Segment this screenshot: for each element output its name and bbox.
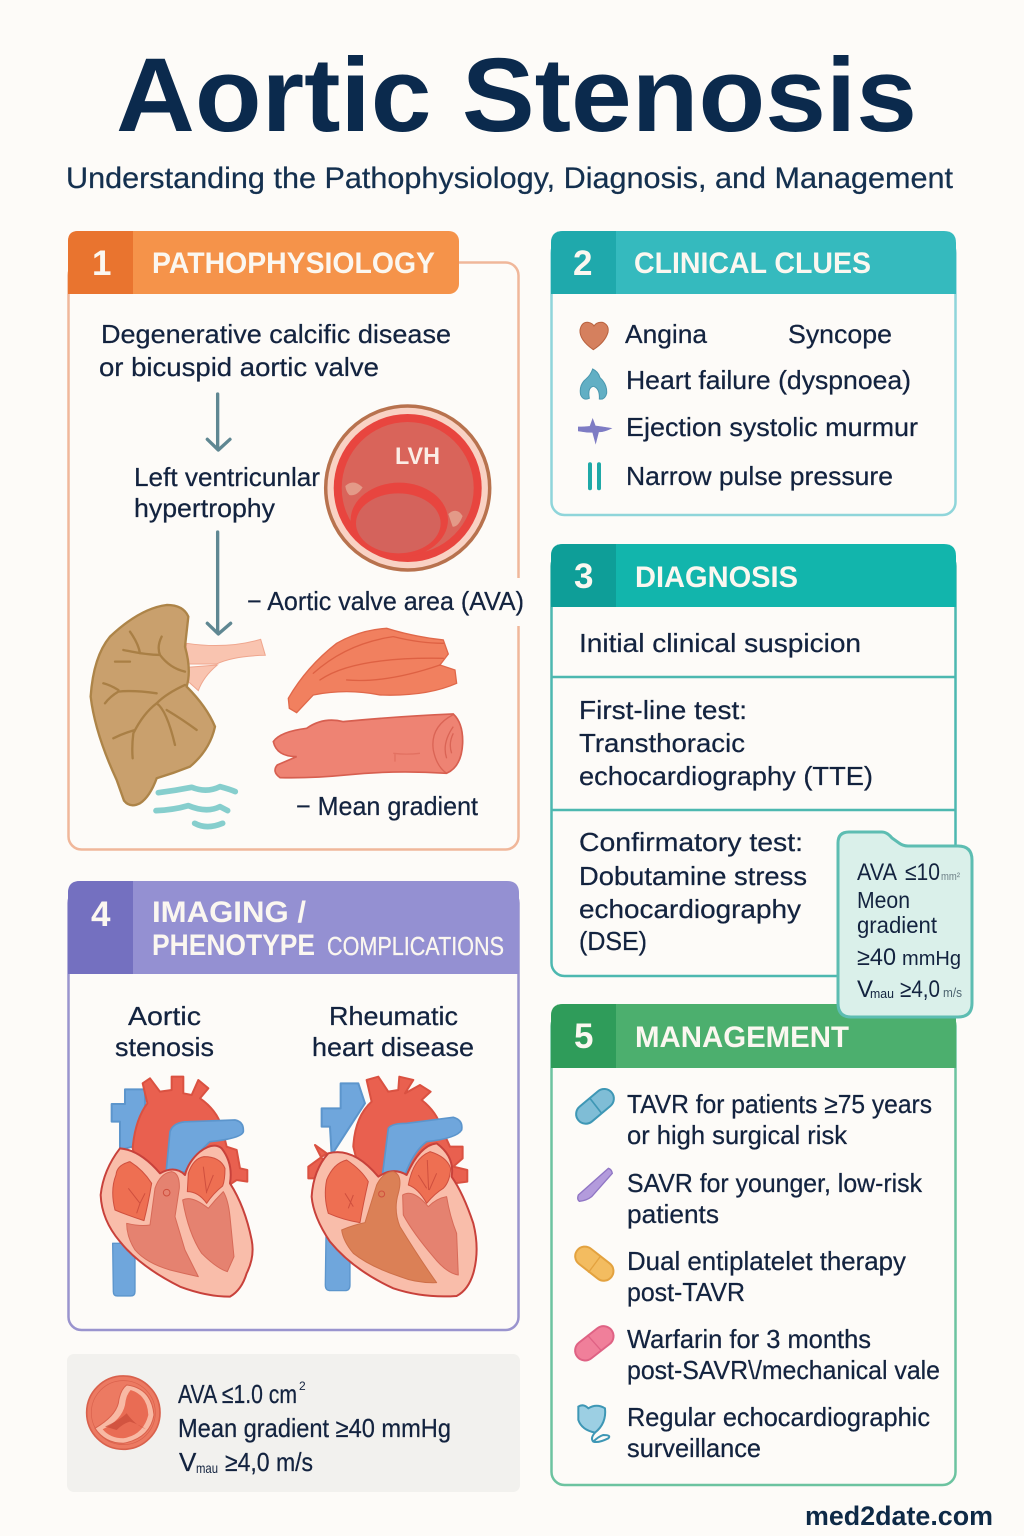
callout: DSE criteria: mau	[870, 986, 894, 1001]
text: antiplatelet	[627, 1246, 906, 1307]
step: confirmatory test: echocardiography	[579, 894, 801, 924]
icon: stenotic valve	[87, 1376, 160, 1449]
label: rheumatic heart disease: Rheumatic	[329, 1001, 458, 1031]
text: warfarin	[627, 1324, 940, 1385]
text: angina: Angina	[625, 319, 708, 349]
text: severe stenosis criteria	[178, 1379, 451, 1477]
text: pulse pressure: Narrow pulse pressure	[626, 461, 893, 491]
panel: management	[551, 1004, 956, 1485]
text: severe stenosis criteria: Mean gradient ≥40 mmHg	[178, 1413, 451, 1443]
step: first-line test: First-line test:	[579, 695, 747, 725]
text: surveillance	[627, 1402, 930, 1463]
callout: DSE criteria: ≥4,0	[900, 976, 940, 1003]
header: imaging	[68, 881, 519, 974]
label: rheumatic heart disease: heart disease	[312, 1032, 474, 1062]
header: management: MANAGEMENT	[635, 1021, 849, 1054]
text: left ventricular hypertrophy	[134, 462, 320, 523]
text: heart failure: Heart failure (dyspnoea)	[626, 365, 911, 395]
header: diagnosis: 3	[574, 557, 593, 596]
header: imaging: 4	[91, 895, 111, 934]
illustration: fluid waves	[156, 787, 235, 827]
illustration: heart, rheumatic heart disease	[308, 1077, 477, 1296]
text: antiplatelet: post-TAVR	[627, 1277, 745, 1307]
callout: DSE criteria: gradient	[857, 912, 938, 938]
text: severe stenosis criteria: mau	[196, 1460, 218, 1476]
icon: heart	[580, 322, 608, 350]
text: TAVR: TAVR for patients ≥75 years	[627, 1089, 932, 1119]
icon: yellow capsule	[571, 1243, 617, 1285]
panel: diagnostic criteria summary	[67, 1354, 520, 1492]
header: imaging: IMAGING /	[152, 896, 307, 929]
callout: DSE criteria	[838, 832, 972, 1017]
text: SAVR: SAVR for younger, low-risk	[627, 1168, 923, 1198]
illustration: aortic muscle	[273, 628, 463, 778]
step: confirmatory test: (DSE)	[579, 926, 647, 956]
panel: imaging	[68, 881, 519, 1330]
step: confirmatory test	[579, 827, 807, 956]
header: management: 5	[574, 1017, 593, 1056]
header: diagnosis: DIAGNOSIS	[635, 561, 798, 594]
text: warfarin: Warfarin for 3 months	[627, 1324, 871, 1354]
header: imaging: PHENOTYPE	[152, 929, 315, 962]
text: severe stenosis criteria: AVA ≤1.0 cm	[178, 1379, 297, 1409]
step: confirmatory test: Dobutamine stress	[579, 861, 807, 891]
text: cause	[99, 319, 451, 382]
text: TAVR: or high surgical risk	[627, 1120, 848, 1150]
header: pathophysiology: 1	[92, 244, 111, 283]
text: warfarin: post-SAVR\/mechanical vale	[627, 1355, 940, 1385]
text: cause: Degenerative calcific disease	[101, 319, 451, 349]
illustration: lung	[91, 605, 265, 805]
icon: pulse bars	[590, 464, 599, 488]
text: murmur: Ejection systolic murmur	[626, 412, 918, 442]
callout: DSE criteria: mmHg	[902, 948, 961, 970]
text: antiplatelet: Dual entiplatelet therapy	[627, 1246, 906, 1276]
header: imaging: COMPLICATIONS	[327, 931, 504, 961]
arrow: cause to hypertrophy	[207, 394, 230, 450]
callout: DSE criteria: AVA	[857, 859, 897, 886]
text: syncope: Syncope	[788, 319, 892, 349]
text: mean gradient: − Mean gradient	[296, 791, 479, 821]
arrow: hypertrophy to lung	[207, 532, 231, 634]
callout: DSE criteria: ≤10	[905, 859, 940, 886]
text: aortic valve area: − Aortic valve area (AVA)	[247, 586, 524, 616]
text: severe stenosis criteria: V	[179, 1447, 197, 1477]
panel: clinical clues	[551, 231, 956, 515]
footer: website: med2date.com	[805, 1501, 993, 1531]
subtitle: Understanding the Pathophysiology, Diagnosis, and Management	[66, 162, 954, 195]
header: clinical clues: CLINICAL CLUES	[634, 247, 871, 280]
text: left ventricular hypertrophy: hypertrophy	[134, 493, 275, 523]
step: first-line test	[579, 695, 873, 791]
text: severe stenosis criteria: ≥4,0 m/s	[225, 1447, 313, 1477]
text: severe stenosis criteria: 2	[299, 1379, 306, 1393]
text: left ventricular hypertrophy: Left ventricunlar	[134, 462, 320, 492]
header: pathophysiology	[68, 231, 459, 294]
title: Aortic Stenosis	[116, 37, 917, 154]
text: surveillance: Regular echocardiographic	[627, 1402, 930, 1432]
callout: DSE criteria: V	[857, 976, 873, 1003]
icon: pink capsule	[571, 1322, 618, 1365]
header: clinical clues: 2	[573, 244, 592, 283]
header: management	[551, 1004, 956, 1068]
callout: DSE criteria: mm²	[941, 871, 960, 883]
label: aortic stenosis: Aortic	[128, 1001, 201, 1031]
step: first-line test: echocardiography (TTE)	[579, 761, 873, 791]
icon: lungs	[580, 369, 607, 399]
panel: diagnosis	[551, 544, 956, 976]
header: pathophysiology: PATHOPHYSIOLOGY	[152, 247, 435, 280]
step: initial suspicion: Initial clinical suspicion	[579, 628, 861, 658]
icon: LVH cross-section: LVH	[395, 443, 440, 470]
text: SAVR: patients	[627, 1199, 719, 1229]
panel: pathophysiology	[68, 231, 524, 850]
illustration: heart, aortic stenosis	[101, 1077, 253, 1297]
header: diagnosis	[551, 544, 956, 607]
step: confirmatory test: Confirmatory test:	[579, 827, 803, 857]
icon: purple stick	[578, 1168, 612, 1201]
header: clinical clues	[551, 231, 956, 294]
text: SAVR	[627, 1168, 923, 1229]
label: rheumatic heart disease	[312, 1001, 474, 1062]
text: cause: or bicuspid aortic valve	[99, 352, 379, 382]
callout: DSE criteria: Meon	[857, 887, 910, 913]
icon: LVH cross-section	[326, 406, 490, 570]
step: first-line test: Transthoracic	[579, 728, 745, 758]
callout: DSE criteria: m/s	[943, 985, 962, 1000]
icon: murmur	[578, 419, 611, 443]
callout: DSE criteria: ≥40	[857, 944, 896, 971]
text: surveillance: surveillance	[627, 1433, 761, 1463]
icon: blue capsule	[572, 1085, 618, 1128]
icon: surveillance probe	[578, 1405, 609, 1442]
label: aortic stenosis: stenosis	[115, 1032, 214, 1062]
text: TAVR	[627, 1089, 932, 1150]
label: aortic stenosis	[115, 1001, 214, 1062]
